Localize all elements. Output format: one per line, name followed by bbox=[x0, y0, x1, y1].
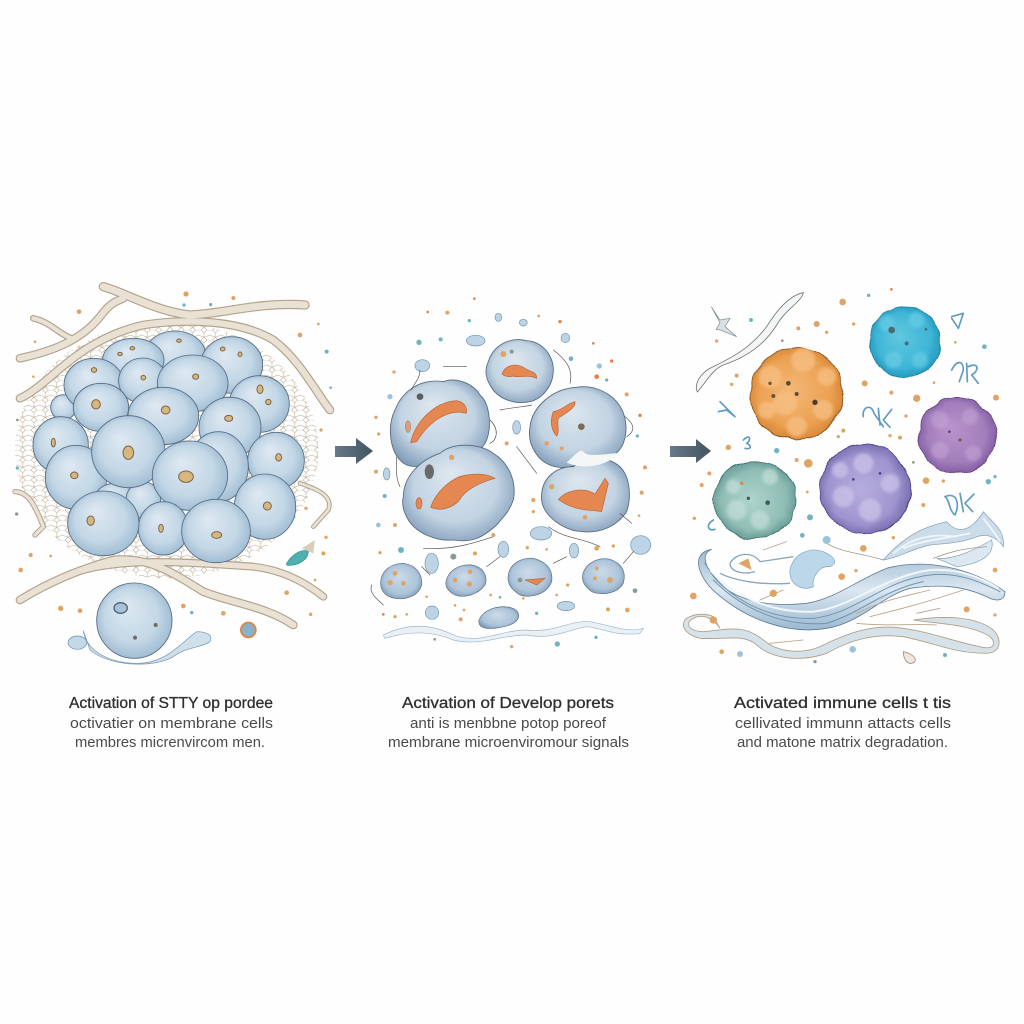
cell: upper right bbox=[529, 387, 626, 467]
caption: step two bbox=[388, 695, 629, 751]
cell: lavender immune cell bbox=[820, 444, 910, 534]
icons: blue curled receptor glyphs bbox=[708, 313, 978, 530]
caption heading: Activated immune cells t tis bbox=[734, 695, 951, 712]
icon: teal vesicle bbox=[287, 540, 315, 565]
ribbon: membrane strand bbox=[383, 622, 643, 642]
net: fibrous mesh bbox=[15, 322, 318, 578]
icon: feathered fragment bbox=[711, 307, 737, 337]
ribbon: lower beige and blue strand bbox=[683, 614, 999, 663]
cell: orange immune cell bbox=[750, 347, 843, 439]
caption line: octivatier on membrane cells bbox=[70, 716, 273, 732]
arrow: step two to three bbox=[670, 439, 711, 463]
icon: small ring organelle bbox=[241, 623, 256, 637]
cell: lower left bbox=[403, 445, 514, 541]
panel: damaged cells with pores bbox=[371, 297, 651, 648]
caption heading: Activation of Develop porets bbox=[402, 695, 614, 712]
specks: scattered debris bbox=[374, 297, 647, 648]
cell: purple immune cell bbox=[919, 398, 996, 474]
cells: small row of budding cells bbox=[381, 558, 624, 628]
caption heading: Activation of STTY op pordee bbox=[69, 695, 273, 712]
ribbons: upper right swooshes bbox=[827, 512, 1003, 567]
ribbon: tendrils below single cell bbox=[68, 631, 211, 664]
panel: activated immune cells and degrading matrix bbox=[683, 288, 1005, 663]
cell: top centre bbox=[486, 340, 553, 403]
caption line: membrane microenviromour signals bbox=[388, 735, 629, 751]
vesicles: blebs attached to cells bbox=[383, 313, 651, 619]
cell: lower right bbox=[541, 451, 629, 532]
arrow: step one to two bbox=[335, 438, 373, 464]
caption line: membres micrenvircom men. bbox=[75, 735, 265, 751]
specks: scattered debris bbox=[15, 291, 332, 616]
fibers: extracellular matrix strands bbox=[15, 287, 330, 625]
cell: pale blue degraded cell bbox=[720, 550, 835, 588]
cell: teal immune cell bbox=[714, 461, 796, 539]
nuclei: small organelles bbox=[51, 339, 282, 538]
caption line: and matone matrix degradation. bbox=[737, 735, 948, 751]
cell: upper left bbox=[390, 380, 489, 466]
cell: cyan immune cell bbox=[870, 307, 940, 378]
caption: step one bbox=[69, 695, 273, 751]
specks: scattered debris bbox=[690, 288, 999, 663]
caption line: cellivated immunn attacts cells bbox=[735, 716, 951, 732]
panel: tightly packed cell cluster in fibrous matrix bbox=[15, 287, 332, 664]
caption line: anti is menbbne potop poreof bbox=[410, 716, 607, 732]
strands: pore fragments and membrane threads bbox=[371, 350, 633, 605]
cells: blue cluster bbox=[33, 331, 304, 563]
ribbon: pale upper-left strand bbox=[696, 293, 803, 392]
ribbon: main wavy matrix band bbox=[699, 549, 1005, 630]
strands: beige matrix debris bbox=[760, 542, 963, 643]
caption: step three bbox=[734, 695, 951, 751]
cell: single detached cell bbox=[97, 583, 172, 658]
